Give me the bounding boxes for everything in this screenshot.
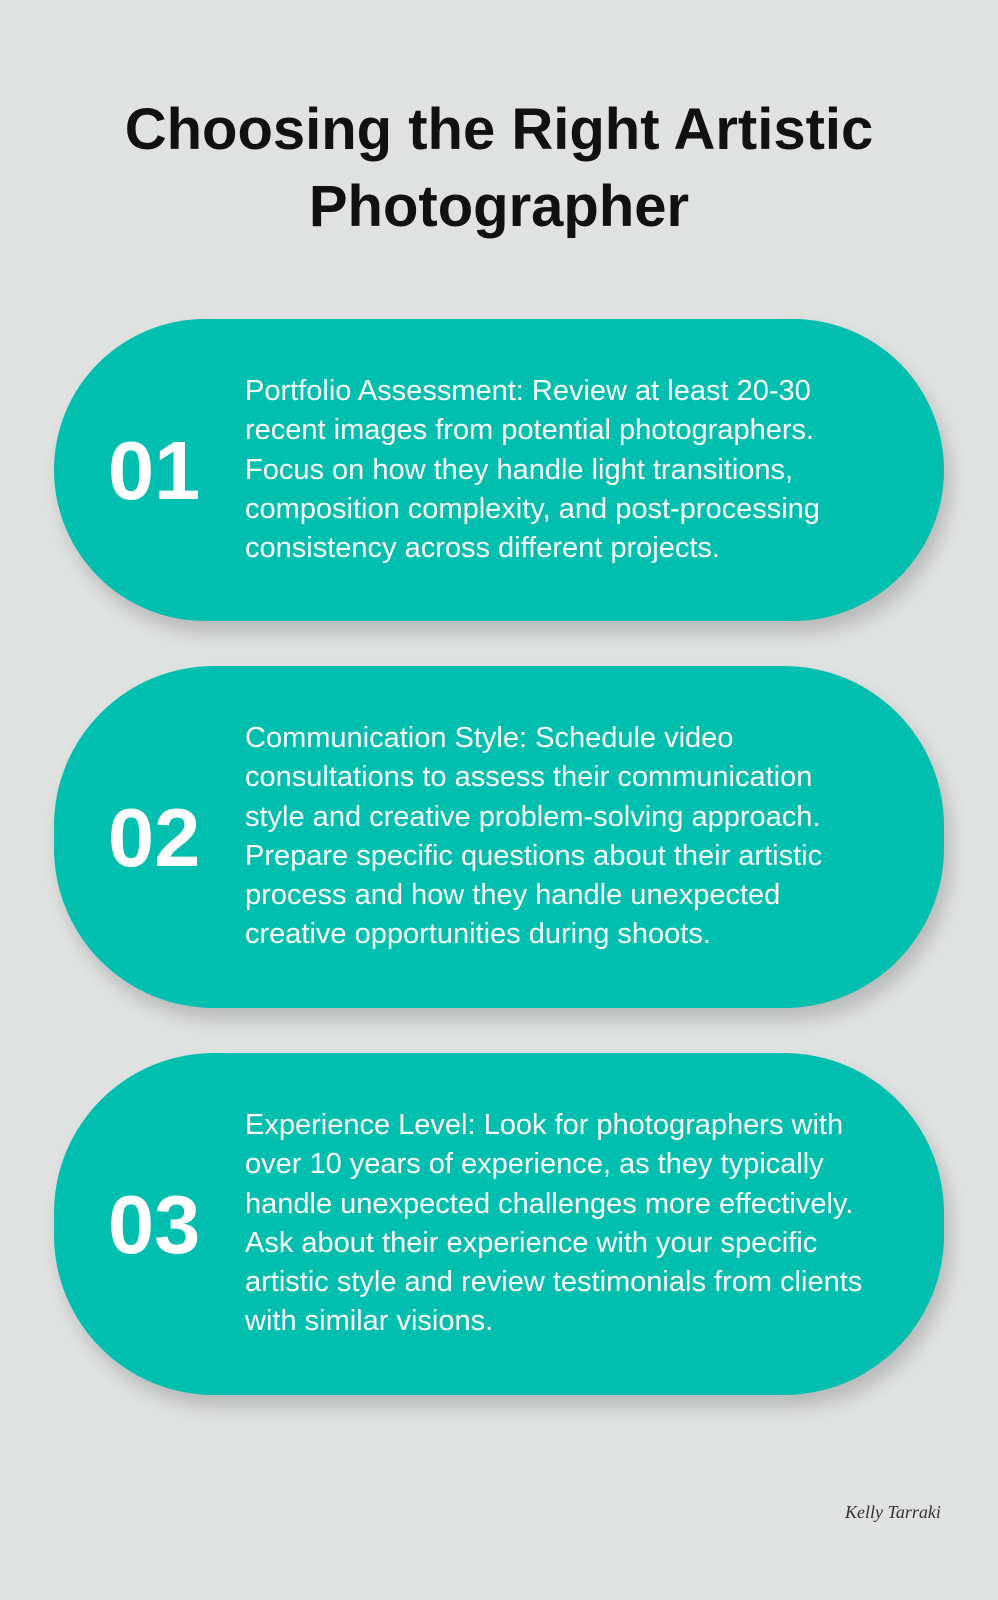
- text: communication style: style and creative problem-solving approach.: [245, 801, 820, 833]
- text: portfolio assessment: Portfolio Assessment: Review at least 20-30: [245, 375, 811, 407]
- text: portfolio assessment: [245, 375, 820, 564]
- number 03: 03: [108, 1178, 200, 1271]
- text: communication style: consultations to assess their communication: [245, 761, 812, 793]
- text: experience level: with similar visions.: [245, 1305, 493, 1337]
- text: portfolio assessment: recent images from potential photographers.: [245, 414, 814, 446]
- title: Choosing the Right Artistic: [125, 97, 873, 162]
- text: communication style: [245, 722, 822, 950]
- text: experience level: Experience Level: Look for photographers with: [245, 1109, 843, 1141]
- text: experience level: artistic style and review testimonials from clients: [245, 1266, 862, 1298]
- logo signature: Kelly Tarraki: [845, 1502, 941, 1522]
- text: experience level: [245, 1109, 862, 1337]
- text: experience level: over 10 years of experience, as they typically: [245, 1148, 824, 1180]
- text: portfolio assessment: composition complexity, and post-processing: [245, 493, 820, 525]
- text: experience level: handle unexpected challenges more effectively.: [245, 1188, 853, 1220]
- title: Photographer: [309, 174, 689, 239]
- text: communication style: Prepare specific questions about their artistic: [245, 840, 822, 872]
- text: communication style: process and how they handle unexpected: [245, 879, 780, 911]
- panel: step 03: [54, 1053, 944, 1395]
- text: experience level: Ask about their experience with your specific: [245, 1227, 817, 1259]
- number 01: 01: [108, 424, 200, 517]
- text: portfolio assessment: consistency across different projects.: [245, 532, 720, 564]
- number 02: 02: [108, 791, 200, 884]
- title: [125, 97, 873, 239]
- panel: step 01: [54, 319, 944, 621]
- text: communication style: Communication Style: Schedule video: [245, 722, 733, 754]
- panel: step 02: [54, 666, 944, 1008]
- text: portfolio assessment: Focus on how they handle light transitions,: [245, 454, 793, 486]
- text: communication style: creative opportunities during shoots.: [245, 918, 711, 950]
